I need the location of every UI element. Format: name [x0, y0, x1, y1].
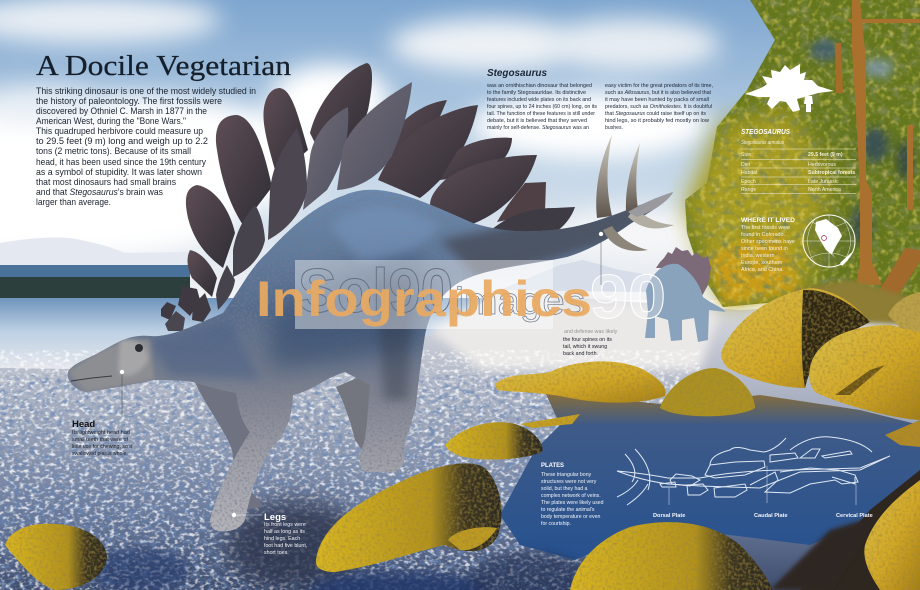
species data table: 29.5 feet (9 m)	[808, 152, 843, 158]
where it lived text: Europe, southern	[741, 260, 782, 266]
back plates row	[310, 63, 372, 147]
stegosaurus article: features included wide plates on its back and	[487, 97, 591, 103]
species data table: STEGOSAURUS	[741, 127, 790, 136]
plates text block: structures were not very	[541, 479, 597, 485]
head callout: little use for chewing, so it	[72, 444, 133, 450]
intro text block: This striking dinosaur is one of the most widely studied in	[36, 86, 256, 96]
icon: globe locator map	[803, 215, 855, 267]
rock: small centre	[446, 422, 543, 459]
watermark: 90	[590, 263, 666, 332]
stegosaurus article: was an ornithischian dinosaur that belonged	[486, 83, 592, 89]
species data table: Diet	[741, 162, 751, 168]
stegosaurus article: bushes.	[605, 125, 623, 131]
where it lived text: since been found in	[741, 246, 788, 252]
watermark: Infographics	[256, 271, 592, 327]
species data table: Habitat	[741, 170, 758, 176]
watermark: Sol90	[298, 257, 453, 326]
head callout: small teeth that were of	[72, 437, 129, 443]
stegosaurus article: such as Allosaurus, but it is also believed that	[605, 90, 711, 96]
diagram labels: Cervical Plate	[836, 513, 873, 519]
legs callout: Legs	[264, 512, 286, 523]
intro text block: the history of paleontology. The first fossils were	[36, 96, 222, 106]
watermark: images	[455, 281, 585, 323]
species data table: Size	[741, 152, 751, 158]
head callout: Its lightweight head had	[72, 430, 130, 436]
distant snowy hills	[0, 238, 650, 299]
species data table: Range	[741, 187, 756, 193]
intro text block: as a symbol of stupidity. It was later shown	[36, 167, 202, 177]
head callout: swallowed plants whole.	[72, 451, 128, 457]
stegosaurus article: to the family Stegosauridae. Its distinctive	[487, 90, 586, 96]
legs callout: hind legs. Each	[264, 536, 300, 542]
stegosaurus article: mainly for self-defense. Stegosaurus was an	[487, 125, 589, 131]
frozen lake	[0, 298, 500, 372]
tail spikes	[596, 135, 612, 218]
plates text block: complex network of veins.	[541, 493, 601, 499]
head callout: Head	[72, 419, 95, 430]
rock: bottom right	[864, 480, 920, 590]
diagram labels: Dorsal Plate	[653, 513, 685, 519]
tail callout: tail, which it swung	[563, 344, 607, 350]
plates text block: for courtship.	[541, 521, 571, 527]
title: A Docile Vegetarian	[36, 50, 292, 82]
where it lived text: Other specimens have	[741, 239, 795, 245]
speckled ground	[0, 292, 920, 590]
main stegosaurus	[68, 63, 680, 531]
species data table: Late Jurassic	[808, 179, 839, 185]
rocks	[5, 288, 920, 590]
species data table: Epoch	[741, 179, 756, 185]
stegosaurus article: four spines, up to 24 inches (60 cm) long, on its	[487, 104, 597, 110]
plates text block: The plates were likely used	[541, 500, 604, 506]
species data table: Subtropical forests	[808, 170, 855, 176]
intro text block: American West, during the "Bone Wars."	[36, 116, 186, 126]
where it lived text: The first fossils were	[741, 225, 790, 231]
small background stegosaurus	[645, 247, 726, 342]
plates text block: These triangular bony	[541, 472, 592, 478]
species data table: Stegosaurus armatus	[741, 140, 784, 146]
tree mass	[685, 0, 920, 325]
intro text block: discovered by Othniel C. Marsh in 1877 in the	[36, 106, 207, 116]
rock: bottom left	[5, 524, 107, 590]
legs callout	[232, 512, 307, 556]
intro text block	[36, 86, 256, 207]
intro text block: larger than average.	[36, 197, 111, 207]
diagram labels	[653, 513, 873, 519]
species data table: Herbivorous	[808, 162, 836, 168]
species data table	[741, 127, 856, 194]
far legs	[195, 382, 264, 510]
plates text block: body temperature or even	[541, 514, 601, 520]
stegosaurus article	[486, 67, 713, 131]
plates text block: to regulate the animal's	[541, 507, 595, 513]
intro text block: to 29.5 feet (9 m) long and weigh up to 2.2	[36, 136, 208, 146]
plates text block	[541, 462, 604, 527]
where it lived text: found in Colorado.	[741, 232, 785, 238]
stegosaurus article: tail. The function of these features is still under	[487, 111, 595, 117]
intro text block: and that Stegosaurus's brain was	[36, 187, 164, 197]
where it lived text: India, western	[741, 253, 775, 259]
plates text block: solid, but they had a	[541, 486, 588, 492]
rock: long shore	[495, 361, 666, 403]
stegosaurus article: hind legs, so it probably fed mostly on low	[605, 118, 710, 124]
species data table: North America	[808, 187, 841, 193]
water pool	[470, 392, 920, 590]
head callout	[72, 370, 133, 457]
where it lived text: Africa, and China.	[741, 267, 784, 273]
front plates row	[303, 107, 348, 210]
tail callout: and defense was likely	[564, 329, 618, 335]
stegosaurus article: that Stegosaurus could raise itself up on its	[605, 111, 706, 117]
stegosaurus article: debate, but it is believed that they served	[487, 118, 587, 124]
diagram labels: Caudal Plate	[754, 513, 788, 519]
stegosaurus article: easy victim for the great predators of its time,	[605, 83, 713, 89]
rock: foreground centre	[316, 463, 502, 572]
watermark	[256, 257, 666, 332]
plates text block: PLATES	[541, 462, 564, 469]
legs callout: short toes.	[264, 550, 289, 556]
plate skeleton diagram	[617, 437, 890, 505]
stegosaurus article: predators, such as Ornitholestes. It is doubtful	[605, 104, 712, 110]
head detail	[135, 344, 143, 352]
icon: white stegosaurus silhouette with human scale	[745, 64, 834, 112]
rock: bottom middle	[570, 522, 772, 590]
rock: big shore right	[809, 325, 920, 420]
legs callout: half as long as its	[264, 529, 305, 535]
tail callout: back and forth.	[563, 351, 598, 357]
intro text block: tons (2 metric tons). Because of its small	[36, 146, 191, 156]
rock: round mossy	[660, 368, 755, 416]
tail callout: the four spines on its	[563, 337, 612, 343]
intro text block: that most dinosaurs had small brains	[36, 177, 177, 187]
sky background	[0, 0, 920, 300]
intro text block: This quadruped herbivore could measure up	[36, 126, 203, 136]
where it lived text	[741, 217, 795, 273]
legs callout: foot had five blunt,	[264, 543, 307, 549]
legs callout: Its front legs were	[264, 522, 306, 528]
stegosaurus article: it may have been hunted by packs of small	[605, 97, 709, 103]
where it lived text: WHERE IT LIVED	[741, 217, 795, 224]
rock: big shore left	[721, 288, 870, 388]
body silhouette	[68, 190, 673, 531]
stegosaurus article: Stegosaurus	[487, 67, 547, 79]
intro text block: head, it has been used since the 19th century	[36, 157, 207, 167]
body shading	[68, 190, 680, 400]
tail callout	[563, 232, 618, 357]
